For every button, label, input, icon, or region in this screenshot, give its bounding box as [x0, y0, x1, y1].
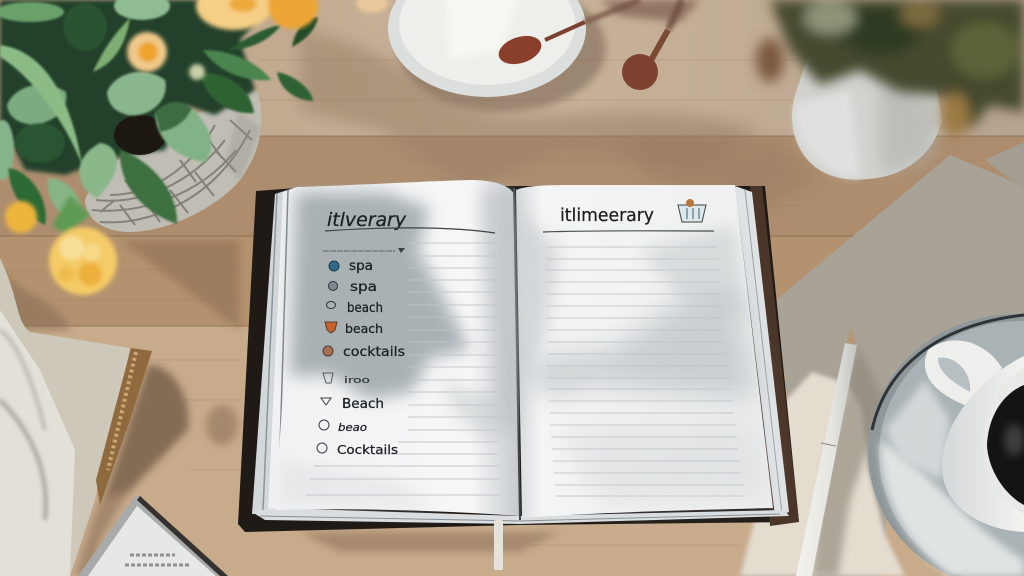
spine — [514, 188, 520, 520]
dark foliage mass — [0, 0, 275, 175]
woven basket — [85, 90, 262, 232]
list top divider — [323, 250, 395, 252]
list: cocktails — [323, 345, 405, 360]
pen — [796, 327, 857, 576]
list: Cocktails — [317, 442, 398, 457]
list: beach: beach — [347, 301, 383, 316]
list: beach orange — [325, 322, 383, 336]
page stack bottom — [252, 508, 789, 524]
right title: itlimeerary — [560, 205, 654, 226]
cover — [238, 186, 799, 532]
roses — [5, 0, 388, 295]
list: spa — [329, 259, 373, 274]
list: beao: beao — [338, 421, 367, 434]
grey cloth — [740, 142, 1024, 576]
linen towel — [0, 258, 130, 576]
list: Beach: Beach — [342, 397, 384, 412]
page stack left — [252, 187, 297, 514]
saucer — [868, 314, 1024, 576]
vase — [792, 50, 942, 180]
left page shadow — [290, 192, 470, 400]
list: faint entry: iroo — [344, 376, 370, 386]
spoons — [495, 0, 700, 90]
bookmark ribbon — [494, 520, 503, 570]
left page — [275, 180, 520, 516]
list: faint entry — [323, 373, 370, 386]
top plate — [388, 0, 606, 112]
list: beao — [319, 420, 367, 434]
towel fringe — [96, 348, 152, 505]
list: beach orange: beach — [345, 322, 383, 336]
page stack right — [735, 186, 789, 516]
doodle cup icon — [678, 199, 706, 222]
right page — [516, 185, 773, 518]
list: spa 2: spa — [350, 280, 377, 295]
right page shadow — [520, 290, 760, 400]
left title: itlverary — [327, 209, 407, 231]
coffee cup — [925, 340, 1024, 532]
list: Cocktails: Cocktails — [337, 442, 398, 457]
list: Beach — [321, 397, 384, 412]
left ruled lines — [306, 243, 500, 495]
list: beach — [326, 301, 383, 316]
small notebook bottom left — [78, 496, 228, 576]
blurred foliage top right — [756, 0, 1024, 137]
leaves — [0, 0, 318, 225]
plant — [0, 0, 388, 295]
notebook — [238, 180, 799, 532]
list: spa: spa — [349, 259, 373, 274]
right ruled lines — [546, 247, 745, 496]
list: spa 2 — [328, 280, 377, 295]
list: cocktails: cocktails — [343, 345, 405, 360]
